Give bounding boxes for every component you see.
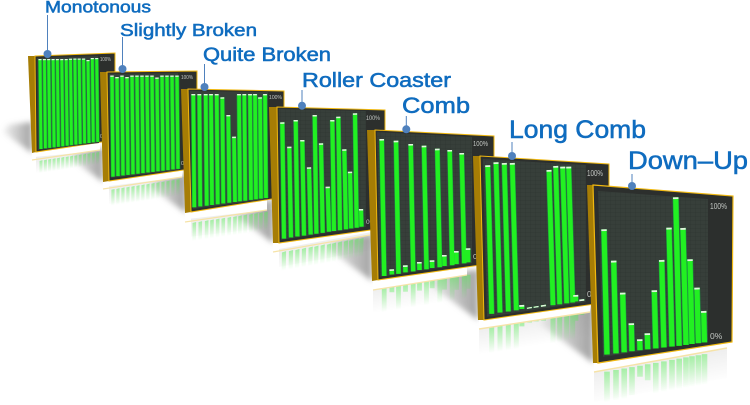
reflection: Monotonous [32, 135, 115, 252]
panel: Monotonous [28, 53, 115, 252]
reflection: Slightly Broken [103, 162, 197, 291]
bars: Comb [382, 139, 468, 276]
scale labels: Long Comb: 100% [587, 169, 603, 178]
reflection: Roller Coaster [273, 215, 385, 378]
frame: Roller Coaster [269, 107, 385, 243]
scale labels: Monotonous [100, 57, 111, 140]
bars: Down-Up [604, 197, 704, 355]
scale labels: Slightly Broken: 100% [181, 75, 193, 81]
panel: Comb [367, 130, 494, 313]
scale labels: Long Comb: 0% [587, 290, 599, 299]
label: Slightly Broken: Slightly Broken [120, 20, 257, 40]
panel: Roller Coaster [269, 107, 385, 378]
scale labels: Slightly Broken: 0% [181, 161, 189, 167]
scale labels: Roller Coaster: 0% [366, 219, 376, 226]
scale labels: Roller Coaster [366, 115, 380, 226]
label: Quite Broken: Quite Broken [203, 45, 331, 66]
leader lines and dots [44, 15, 636, 190]
scale labels: Down-Up: 0% [710, 331, 723, 341]
bars: Roller Coaster [282, 113, 362, 239]
label: Down-Up: Down–Up [628, 147, 748, 175]
scale labels: Roller Coaster: 100% [366, 115, 380, 122]
bars: Quite Broken [193, 94, 266, 207]
scale labels: Long Comb [587, 169, 603, 299]
reflection: Comb [373, 267, 468, 313]
bars: Long Comb [488, 162, 582, 314]
reflection: Down-Up [594, 343, 727, 402]
label: Comb: Comb [402, 93, 470, 118]
frame: Comb [367, 130, 494, 281]
frame: Slightly Broken [100, 71, 197, 182]
scale labels: Quite Broken: 100% [269, 95, 282, 101]
scale labels: Monotonous: 0% [100, 134, 108, 140]
panel: Quite Broken [181, 89, 284, 336]
panel: Down-Up [587, 185, 733, 402]
reflection: Long Comb [479, 304, 590, 354]
scale labels: Down-Up [710, 201, 727, 341]
scale labels: Slightly Broken [181, 75, 193, 167]
panel: Long Comb [473, 156, 609, 354]
scale labels: Comb [473, 139, 488, 261]
frame: Long Comb [473, 156, 609, 320]
frame: Monotonous [28, 53, 115, 153]
reflection: Quite Broken [185, 193, 284, 336]
scale labels: Comb: 0% [473, 252, 484, 261]
frame: Down-Up [587, 185, 733, 363]
panel: Slightly Broken [100, 71, 197, 291]
bars: Monotonous [40, 58, 98, 149]
frame: Quite Broken [181, 89, 284, 213]
scale labels: Down-Up: 100% [710, 201, 727, 211]
scale labels: Monotonous: 100% [100, 57, 111, 63]
label: Roller Coaster: Roller Coaster [302, 69, 451, 92]
bars: Slightly Broken [112, 76, 178, 177]
scale labels: Comb: 100% [473, 139, 488, 148]
label: Long Comb: Long Comb [509, 116, 646, 144]
floor shadows [3, 122, 593, 363]
